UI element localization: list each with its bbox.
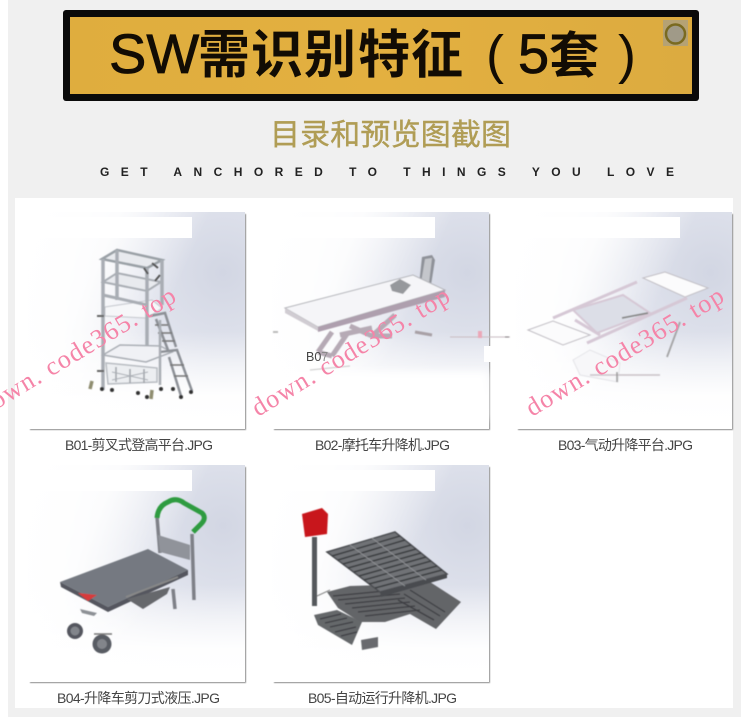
card: B03 (505, 212, 733, 430)
icon: ring badge (663, 20, 688, 46)
banner title text: 需 (198, 27, 250, 85)
title banner (63, 10, 699, 101)
illustration: hydraulic scissor lift cart (60, 500, 204, 654)
card: B05 (272, 465, 490, 683)
subtitle: 目录和预览图截图 (270, 119, 511, 152)
banner title text: ) (618, 25, 636, 85)
banner title text: 别 (304, 27, 356, 85)
banner title text: 5 (518, 22, 549, 85)
caption: B02: B02-摩托车升降机.JPG (315, 437, 450, 453)
card: B02 (272, 212, 510, 430)
banner title text: ( (486, 25, 504, 85)
caption: B04: B04-升降车剪刀式液压.JPG (57, 690, 220, 706)
caption: B03: B03-气动升降平台.JPG (558, 437, 693, 453)
illustration: motorcycle lift (285, 255, 445, 356)
banner title text: SW (109, 22, 199, 85)
banner title text: 识 (251, 27, 303, 85)
caption: B01: B01-剪叉式登高平台.JPG (65, 437, 213, 453)
panel: preview gallery (15, 198, 733, 708)
watermark: middle: down. code365. top (246, 281, 455, 422)
banner title text: 套 (549, 28, 599, 84)
banner title text: 征 (411, 27, 463, 85)
watermark: right: down. code365. top (520, 281, 729, 422)
illustration: pneumatic lift platform (505, 272, 708, 382)
right edge gap (484, 346, 494, 362)
card: B01 (28, 212, 246, 430)
tagline: GET ANCHORED TO THINGS YOU LOVE (100, 165, 674, 179)
caption: B05: B05-自动运行升降机.JPG (308, 690, 457, 706)
illustration: automatic lift with red control box (302, 508, 461, 650)
card: B04 (28, 465, 246, 683)
line mark (273, 331, 510, 370)
white retouch blob (290, 372, 488, 420)
illustration: scissor climbing platform (90, 250, 193, 399)
banner title text: 特 (358, 27, 410, 85)
partially covered label: B07 (306, 350, 328, 364)
